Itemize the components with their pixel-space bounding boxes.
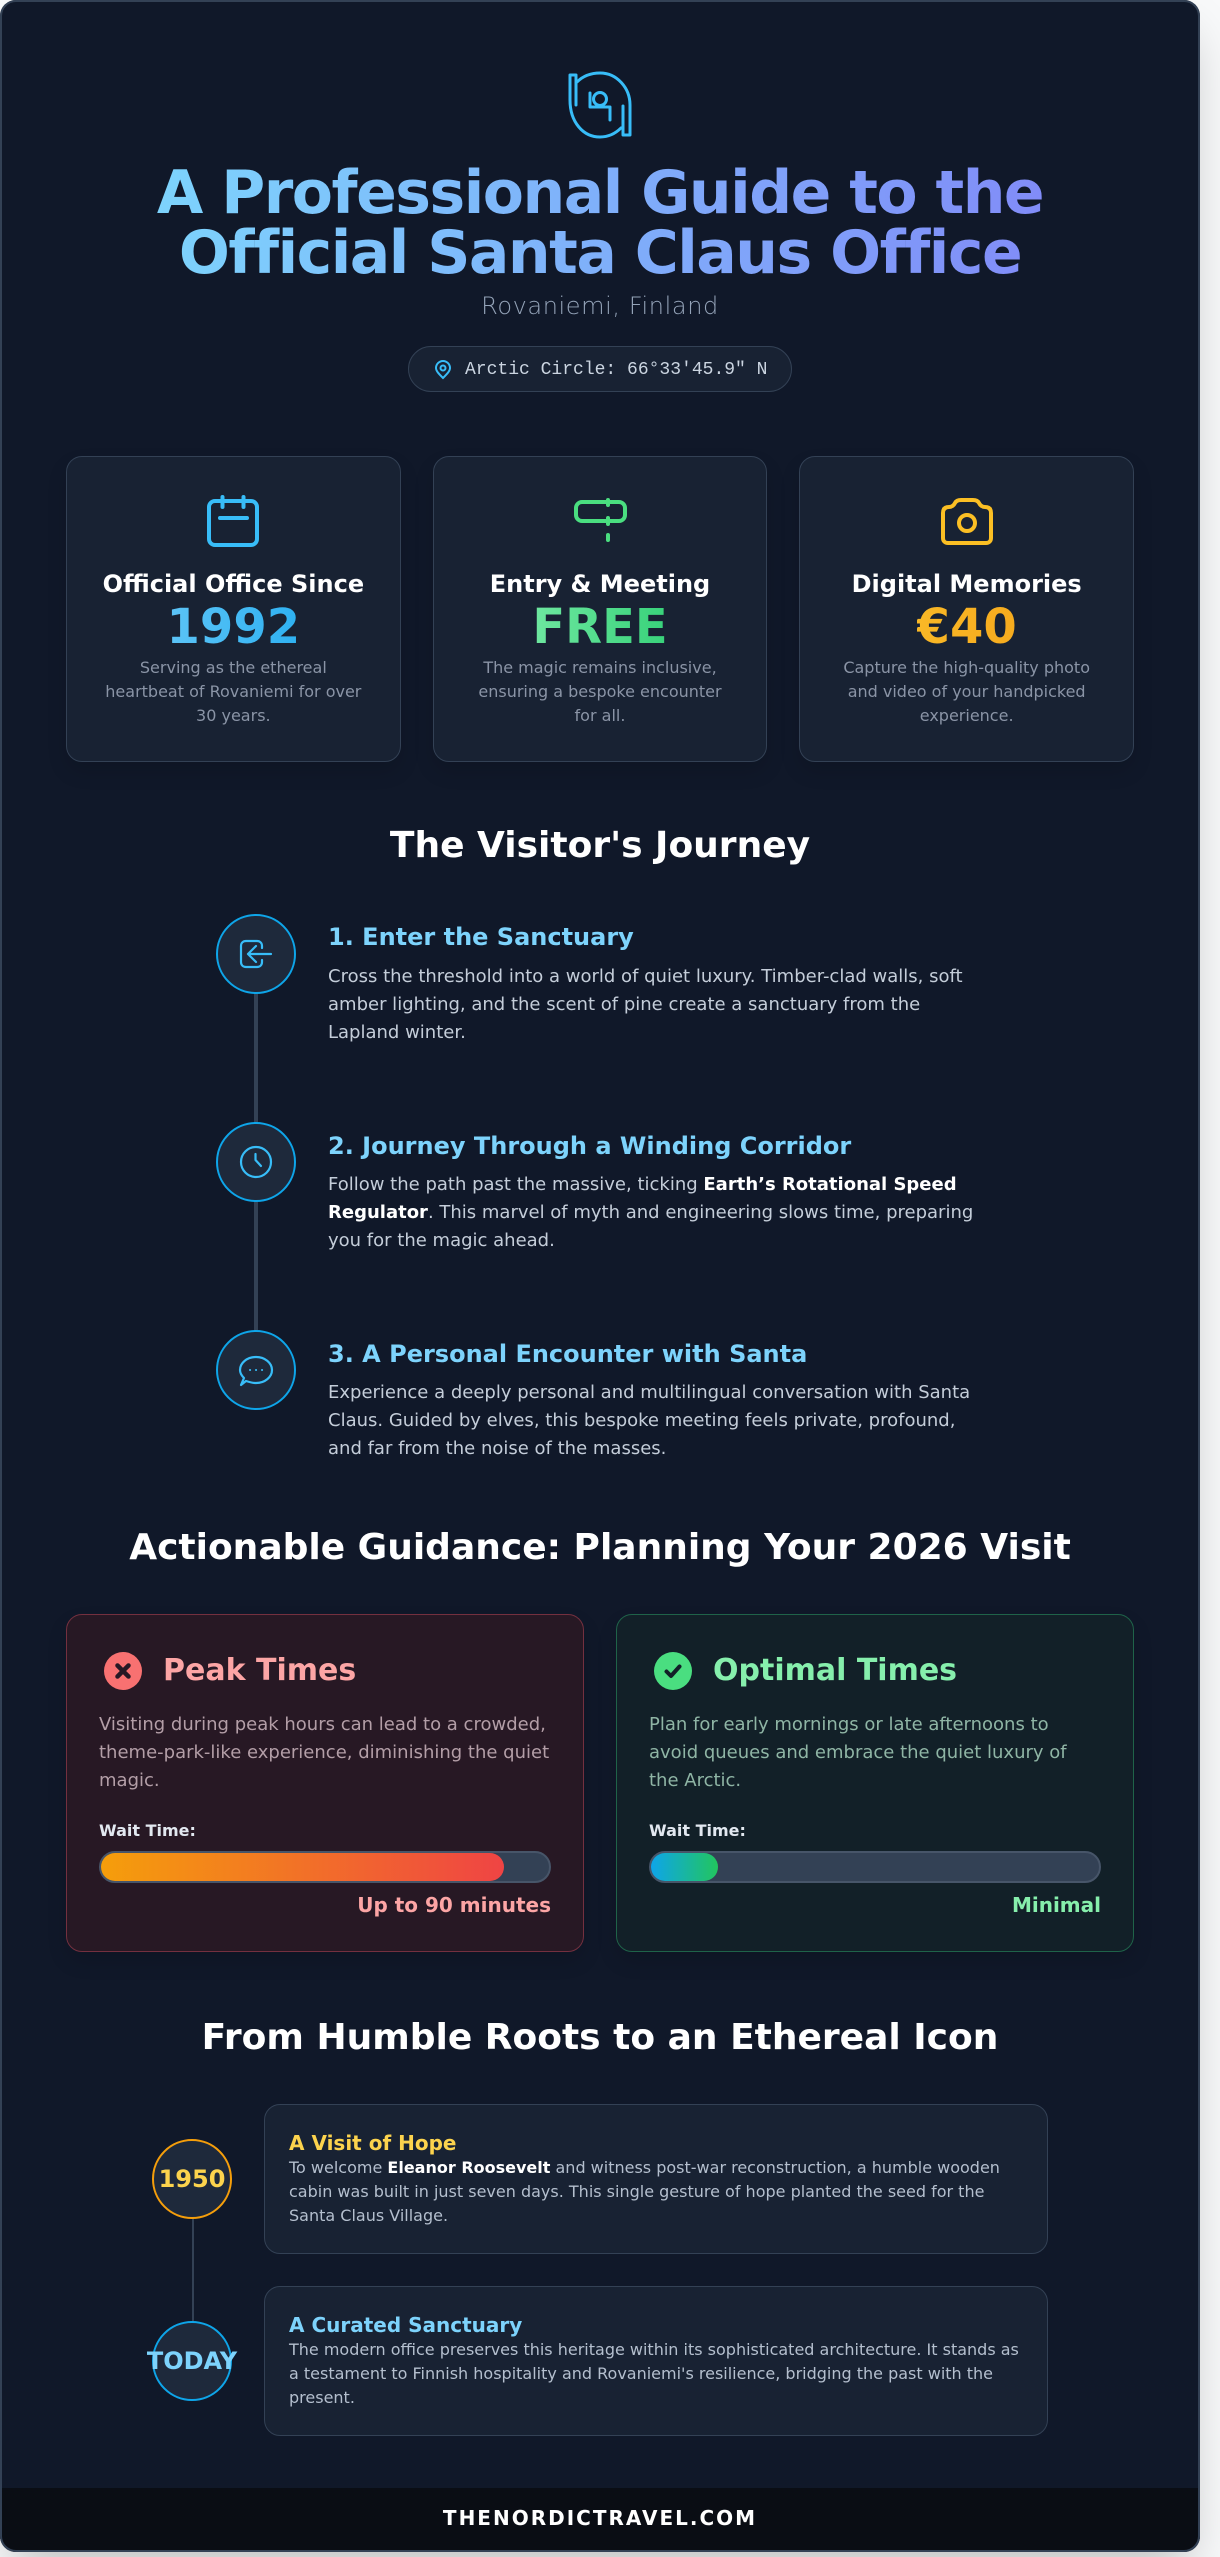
panel: digital memories <box>799 456 1134 762</box>
wait time label: Wait Time: <box>99 1821 196 1840</box>
step 3 text: and far from the noise of the masses. <box>328 1438 666 1459</box>
history text: cabin was built in just seven days. This single gesture of hope planted the seed for the <box>289 2182 984 2201</box>
year marker 1950: 1950 <box>159 2165 225 2193</box>
history heading: A Visit of Hope <box>289 2131 456 2155</box>
panel text: Visiting during peak hours can lead to a crowded, <box>99 1714 546 1735</box>
panel: entry and meeting <box>433 456 767 762</box>
wait time bar <box>649 1851 1101 1883</box>
card description: for all. <box>575 706 625 725</box>
year marker 1950 <box>152 2139 232 2219</box>
panel text: magic. <box>99 1770 160 1791</box>
coordinates text: Arctic Circle: 66°33'45.9" N <box>465 360 767 380</box>
card description: ensuring a bespoke encounter <box>478 682 722 701</box>
year marker today <box>152 2321 232 2401</box>
step 1 text: Lapland winter. <box>328 1022 466 1043</box>
card description <box>843 658 1090 725</box>
icon: clock <box>240 1146 272 1178</box>
step 2 text: Follow the path past the massive, ticking Earth’s Rotational Speed <box>328 1174 957 1195</box>
card description: The magic remains inclusive, <box>483 658 717 677</box>
step 1 text: Cross the threshold into a world of quiet luxury. Timber-clad walls, soft <box>328 966 963 987</box>
icon: calendar <box>207 495 259 547</box>
subtitle: Rovaniemi, Finland <box>481 292 719 320</box>
history text: To welcome Eleanor Roosevelt and witness post-war reconstruction, a humble wooden <box>289 2158 1000 2177</box>
step 2 text <box>328 1174 973 1251</box>
history heading: A Curated Sanctuary <box>289 2313 522 2337</box>
icon: x circle <box>104 1652 142 1690</box>
history text <box>288 2158 1000 2225</box>
icon: check circle <box>654 1652 692 1690</box>
stat: free: FREE <box>532 599 668 655</box>
panel text: theme-park-like experience, diminishing the quiet <box>99 1742 549 1763</box>
step 3 text <box>328 1382 970 1459</box>
card description: experience. <box>920 706 1014 725</box>
history connector line <box>192 2218 194 2322</box>
panel text <box>99 1714 549 1791</box>
stat: 1992: 1992 <box>167 599 300 655</box>
panel: official office since <box>66 456 401 762</box>
card description: and video of your handpicked <box>848 682 1086 701</box>
panel text: Plan for early mornings or late afternoons to <box>649 1714 1049 1735</box>
wait time bar <box>99 1851 551 1883</box>
wait time value: Up to 90 minutes <box>357 1893 551 1917</box>
journey timeline line <box>254 990 258 1330</box>
card heading: Entry & Meeting <box>490 570 710 598</box>
card heading: Official Office Since <box>103 570 364 598</box>
history text: The modern office preserves this heritage within its sophisticated architecture. It stands as <box>289 2340 1019 2359</box>
panel heading: Peak Times <box>163 1653 356 1688</box>
year marker today: TODAY <box>147 2347 237 2375</box>
history text: Santa Claus Village. <box>289 2206 448 2225</box>
heading: humble roots: From Humble Roots to an Ethereal Icon <box>202 2017 998 2058</box>
icon: enter <box>240 940 272 968</box>
card description: Capture the high-quality photo <box>843 658 1090 677</box>
icon: ticket sign <box>574 498 627 542</box>
history card: visit of hope <box>264 2104 1048 2254</box>
step 2 text: Regulator. This marvel of myth and engineering slows time, preparing <box>328 1202 973 1223</box>
history text <box>288 2340 1019 2407</box>
footer: THENORDICTRAVEL.COM <box>443 2506 757 2530</box>
wait time label: Wait Time: <box>649 1821 746 1840</box>
card description <box>478 658 722 725</box>
step 1 icon circle <box>216 914 296 994</box>
heading: visitor's journey: The Visitor's Journey <box>390 825 810 866</box>
step 2 text: you for the magic ahead. <box>328 1230 555 1251</box>
card description: Serving as the ethereal <box>140 658 327 677</box>
panel: optimal times <box>616 1614 1134 1952</box>
card heading: Digital Memories <box>852 570 1082 598</box>
history text: present. <box>289 2388 355 2407</box>
footer <box>0 2488 1200 2552</box>
step 3 icon circle <box>216 1330 296 1410</box>
step 3 text: Experience a deeply personal and multilingual conversation with Santa <box>328 1382 970 1403</box>
history text: a testament to Finnish hospitality and Rovaniemi's resilience, bridging the past with the <box>289 2364 993 2383</box>
icon: camera <box>941 498 993 545</box>
panel text: the Arctic. <box>649 1770 741 1791</box>
title <box>157 158 1043 288</box>
stat: 40 euro: €40 <box>917 599 1017 655</box>
step 2 icon circle <box>216 1122 296 1202</box>
panel heading: Optimal Times <box>713 1653 957 1688</box>
card description: 30 years. <box>196 706 271 725</box>
title: Official Santa Claus Office <box>179 218 1021 288</box>
icon: chat bubble <box>238 1356 274 1386</box>
icon: logo emblem <box>568 72 632 138</box>
step 2 heading: 2. Journey Through a Winding Corridor <box>328 1132 851 1160</box>
heading: actionable guidance: Actionable Guidance: Planning Your 2026 Visit <box>129 1527 1071 1568</box>
panel: peak times <box>66 1614 584 1952</box>
title: A Professional Guide to the <box>157 158 1043 228</box>
card description: heartbeat of Rovaniemi for over <box>105 682 361 701</box>
wait time value: Minimal <box>1012 1893 1101 1917</box>
card description <box>105 658 362 725</box>
history card: curated sanctuary <box>264 2286 1048 2436</box>
panel text: avoid queues and embrace the quiet luxury of <box>649 1742 1067 1763</box>
step 1 heading: 1. Enter the Sanctuary <box>328 923 634 951</box>
step 1 text: amber lighting, and the scent of pine create a sanctuary from the <box>328 994 920 1015</box>
step 3 text: Claus. Guided by elves, this bespoke meeting feels private, profound, <box>328 1410 955 1431</box>
step 1 text <box>328 966 963 1043</box>
panel text <box>649 1714 1067 1791</box>
coordinates pill <box>408 346 792 392</box>
icon: map pin <box>435 360 451 380</box>
step 3 heading: 3. A Personal Encounter with Santa <box>328 1340 807 1368</box>
